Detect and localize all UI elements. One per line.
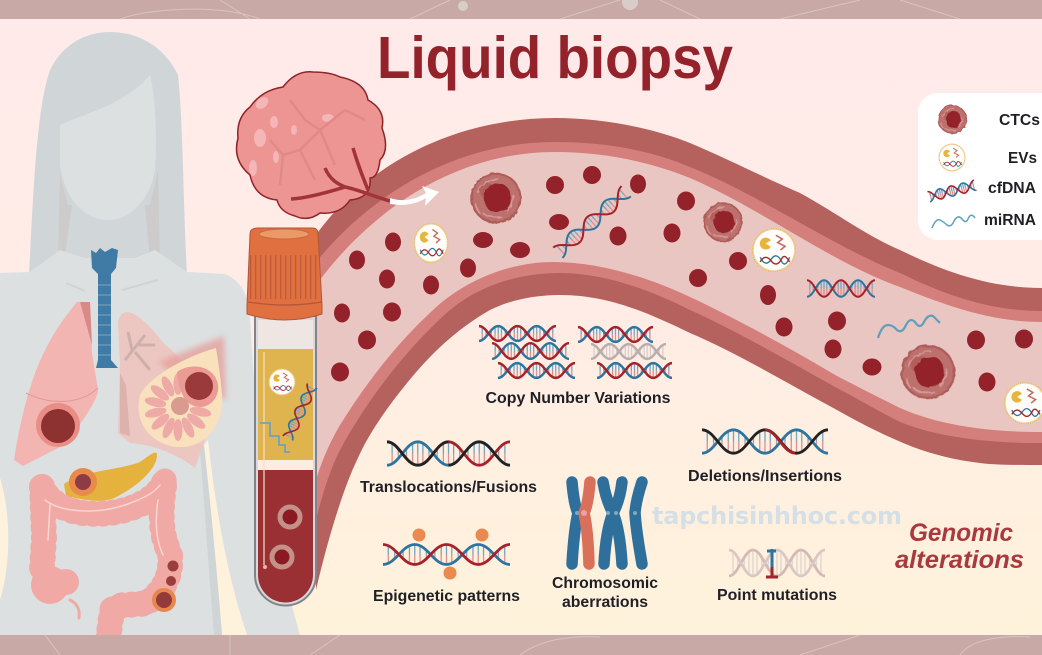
blood collection tube [247,228,322,610]
organ: pancreas with tumor [64,452,157,501]
tube: orange cap [247,228,322,320]
top decorative strip [0,0,1042,19]
legend: miRNA [932,212,1036,229]
blood vessel [316,118,1042,590]
vessel: lumen [316,152,1042,480]
chromosomic aberrations: aberrations [562,594,648,611]
legend: EVs: EVs [1008,150,1037,167]
legend: CTCs: CTCs [999,112,1040,129]
watermark: tapchisinhhoc.com [652,502,902,530]
tumor feeding vessel [291,148,390,201]
body: face [60,75,156,220]
tumor [236,72,386,218]
legend [918,93,1042,240]
genomic alterations label: Genomic [909,519,1013,547]
epigenetic patterns [373,528,520,605]
body: hair [29,32,187,275]
organ: left lung with tumor [14,302,98,466]
body: neck front [64,205,150,262]
epigenetic patterns: Epigenetic patterns [373,588,520,605]
cfDNA in vessel [553,186,875,297]
legend: miRNA: miRNA [984,212,1036,229]
tumor mass with vessel and arrow [236,72,439,218]
copy number variations [479,326,672,407]
extracellular vesicles [414,223,1042,424]
tube: extracellular vesicle [269,369,295,395]
circulating tumor cells [472,174,954,398]
point mutations [717,549,837,604]
chromosomic aberrations: Chromosomic [552,575,658,592]
tube: cfDNA [283,384,317,440]
body: torso and arms [0,250,300,635]
body: side gaps [204,440,247,635]
vessel: outer wall [316,118,1042,590]
tumor texture [249,95,365,185]
deletions and insertions [688,430,842,485]
figure: human body with organs [0,32,300,640]
organ: trachea [91,248,118,368]
genomic alterations label [895,519,1024,574]
title: Liquid biopsy [377,25,733,91]
copy number variations: Copy Number Variations [486,390,671,407]
translocations and fusions: Translocations/Fusions [360,479,537,496]
legend: EVs [939,144,1037,171]
vessel: inner wall [316,142,1042,520]
legend: CTCs [939,106,1040,133]
organ: colon with tumors [31,480,178,640]
red blood cells [331,166,1033,392]
body: collarbones [66,280,158,291]
genomic alterations section [360,326,1024,611]
body: neck [58,172,160,253]
organ: breast with tumor [139,336,226,447]
miRNA in vessel [878,316,940,338]
organ: right lung [118,312,205,468]
deletions and insertions: Deletions/Insertions [688,468,842,485]
genomic alterations label: alterations [895,546,1024,574]
tube: glass [255,316,316,605]
legend: background [918,93,1042,240]
translocations and fusions [360,442,537,496]
legend: cfDNA [927,180,1036,202]
point mutations: Point mutations [717,587,837,604]
chromosomic aberrations [552,482,658,611]
tube: contents [258,320,313,610]
bottom decorative strip [0,635,1042,655]
legend: cfDNA: cfDNA [988,180,1036,197]
tube: tumor cells in blood [272,507,300,567]
arrow: tumor to bloodstream [390,186,439,206]
tube: miRNA [260,423,290,452]
